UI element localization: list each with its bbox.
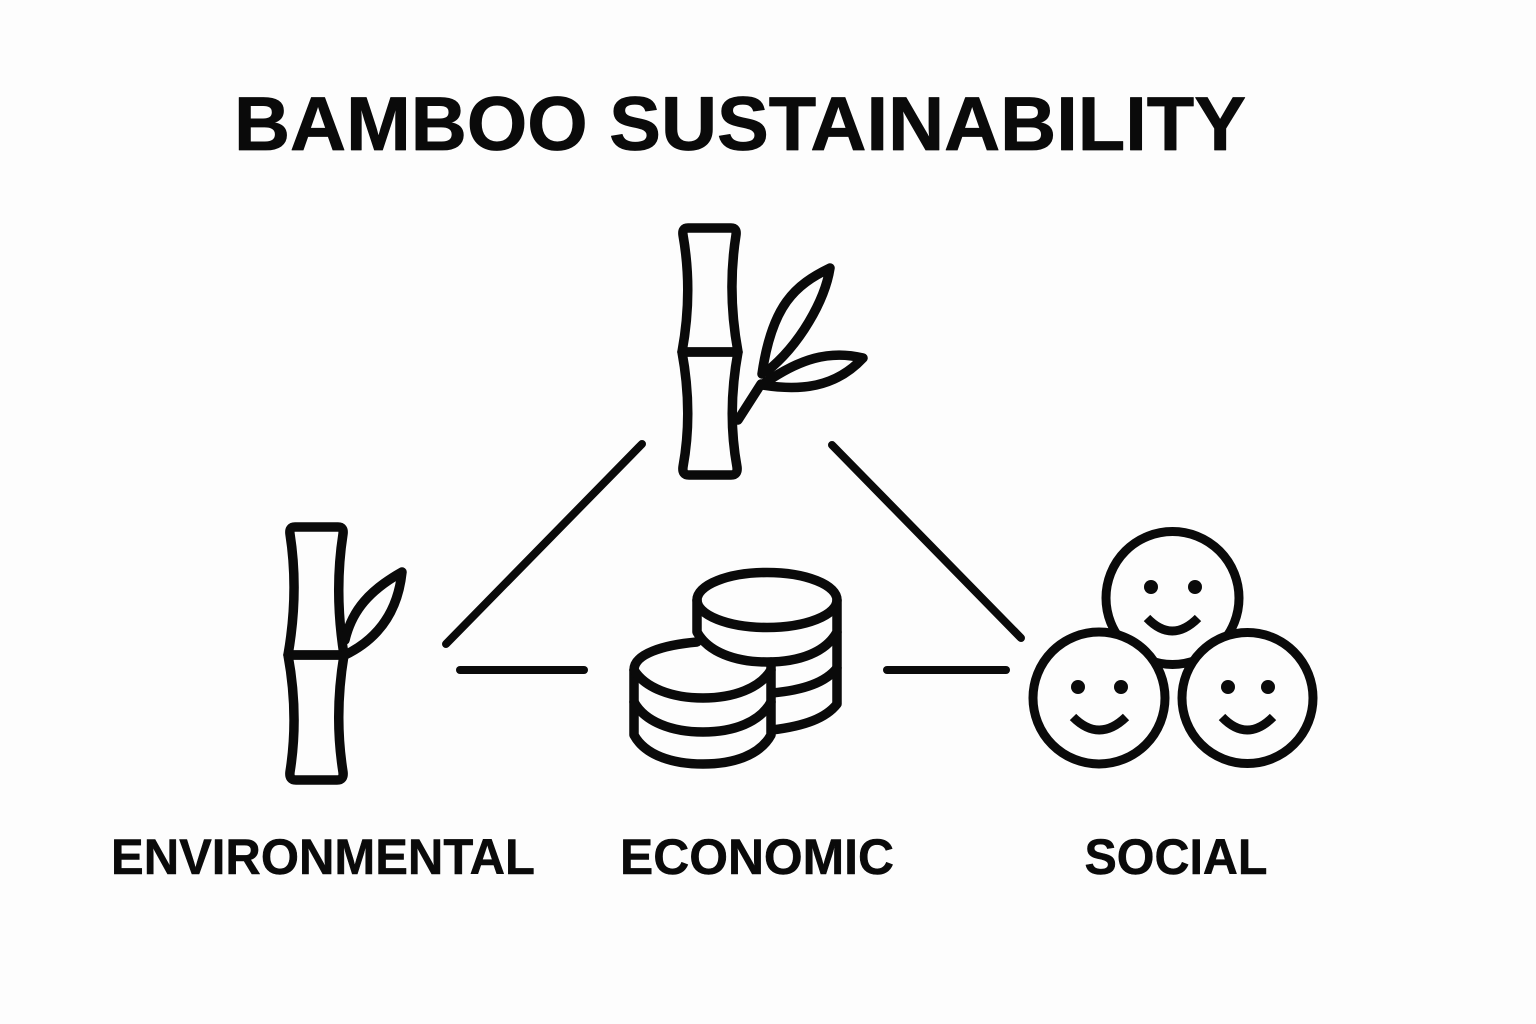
label: economic: ECONOMIC xyxy=(620,829,894,885)
icon: central bamboo xyxy=(682,228,863,475)
icon: coin stacks xyxy=(634,572,837,764)
title: BAMBOO SUSTAINABILITY xyxy=(234,82,1246,167)
front stack xyxy=(634,642,771,764)
icon: environmental bamboo xyxy=(288,527,402,780)
arrow: economic to social connector xyxy=(887,666,1006,674)
label: social: SOCIAL xyxy=(1084,829,1268,885)
back stack xyxy=(697,572,837,730)
icon: top face xyxy=(1106,532,1239,664)
label: environmental: ENVIRONMENTAL xyxy=(111,829,535,885)
icon: smiling people xyxy=(1033,532,1313,764)
arrow: environmental to economic connector xyxy=(460,666,584,674)
icon: left face xyxy=(1033,632,1165,764)
arrow: top to environmental connector xyxy=(446,444,642,644)
arrow: top to social connector xyxy=(832,445,1021,638)
icon: right face xyxy=(1182,632,1313,764)
